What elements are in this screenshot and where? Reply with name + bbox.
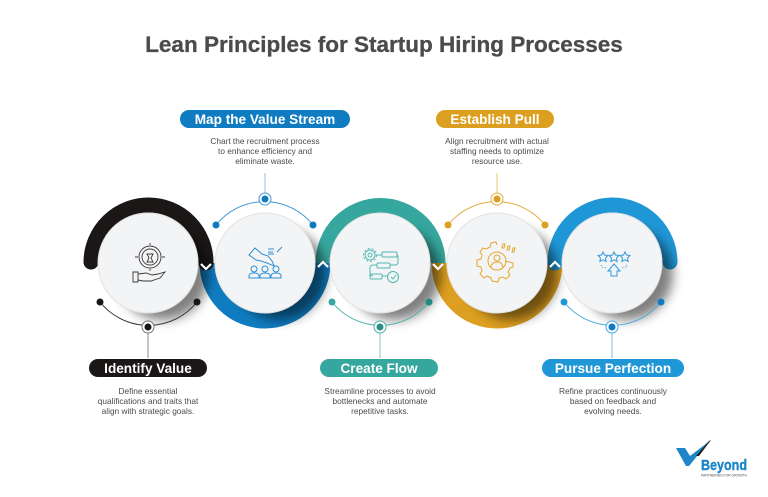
- connector: Pursue Perfection: [560, 298, 664, 358]
- pill: Establish Pull: [436, 110, 554, 128]
- icon: hand holding target bulb: [133, 243, 165, 282]
- text: Identify Value: align with strategic goals.: [102, 406, 194, 416]
- text: Establish Pull: [445, 136, 549, 166]
- logo tagline: PARTNERING FOR GROWTH: [701, 474, 747, 478]
- step 2: Map the Value Stream: Map the Value Stream: [195, 112, 335, 127]
- connector: Identify Value: [96, 298, 200, 358]
- text: Pursue Perfection: based on feedback and: [570, 396, 657, 406]
- circle: Identify Value: [98, 213, 198, 313]
- step 1: Identify Value: [89, 213, 207, 416]
- step 5: Pursue Perfection: [542, 213, 684, 416]
- circle: Pursue Perfection: [562, 213, 662, 313]
- circle: Create Flow: [330, 213, 430, 313]
- text: Identify Value: Define essential: [118, 386, 178, 396]
- text: Establish Pull: Align recruitment with actual: [445, 136, 549, 146]
- icon: hand pointing at team: [249, 247, 282, 278]
- pill: Map the Value Stream: [180, 110, 350, 128]
- text: Identify Value: qualifications and traits that: [98, 396, 199, 406]
- connector: Establish Pull: [444, 173, 548, 228]
- pill: Identify Value: [89, 359, 207, 377]
- text: Establish Pull: resource use.: [472, 156, 522, 166]
- circle shadows: [117, 228, 673, 320]
- pill: Create Flow: [320, 359, 438, 377]
- text: Establish Pull: staffing needs to optimize: [450, 146, 544, 156]
- connector: Create Flow: [328, 298, 432, 358]
- logo check mark: [676, 440, 710, 466]
- text: Pursue Perfection: evolving needs.: [584, 406, 642, 416]
- connector: Map the Value Stream: [212, 173, 316, 228]
- text: Create Flow: repetitive tasks.: [351, 406, 409, 416]
- text: Map the Value Stream: to enhance efficiency and: [218, 146, 312, 156]
- text: Pursue Perfection: [559, 386, 668, 416]
- text: Identify Value: [98, 386, 199, 416]
- step 3: Create Flow: [320, 213, 438, 416]
- pill: Pursue Perfection: [542, 359, 684, 377]
- circle: Establish Pull: [447, 213, 547, 313]
- logo wordmark: Beyond: [701, 457, 747, 474]
- step 1: Identify Value: Identify Value: [104, 361, 192, 376]
- text: Create Flow: [324, 386, 436, 416]
- icon: three stars with up arrow: [598, 252, 630, 276]
- text: Pursue Perfection: Refine practices continuously: [559, 386, 668, 396]
- circle: Map the Value Stream: [215, 213, 315, 313]
- step 4: Establish Pull: [436, 110, 554, 313]
- text: Map the Value Stream: [210, 136, 320, 166]
- text: Map the Value Stream: eliminate waste.: [235, 156, 295, 166]
- title: Lean Principles for Startup Hiring Processes: [145, 32, 623, 57]
- step 3: Create Flow: Create Flow: [340, 361, 418, 376]
- text: Create Flow: bottlenecks and automate: [332, 396, 428, 406]
- icon: gear with person: [477, 242, 515, 282]
- step 5: Pursue Perfection: Pursue Perfection: [555, 361, 671, 376]
- step 2: Map the Value Stream: [180, 110, 350, 313]
- logo: Beyond: [676, 440, 747, 478]
- text: Create Flow: Streamline processes to avoid: [324, 386, 436, 396]
- step 4: Establish Pull: Establish Pull: [450, 112, 540, 127]
- text: Map the Value Stream: Chart the recruitment process: [210, 136, 320, 146]
- icon: process flow with gear: [364, 248, 398, 282]
- ring arcs connecting the steps: [91, 205, 670, 321]
- chevrons at ring junctions: [201, 262, 560, 269]
